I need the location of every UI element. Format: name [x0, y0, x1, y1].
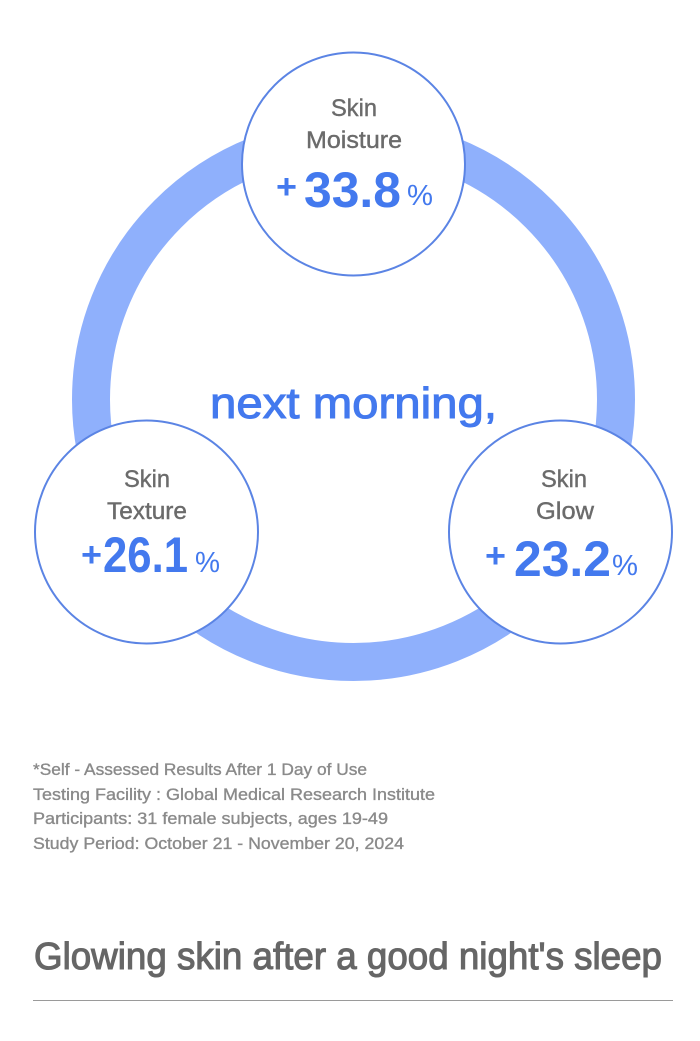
panel: skin glow: 23.2	[514, 531, 611, 587]
panel: skin texture: %	[195, 547, 220, 579]
panel: skin moisture: Skin	[331, 95, 377, 122]
ring	[91, 137, 616, 662]
panel: skin texture: +	[81, 536, 102, 574]
panel: skin moisture: %	[407, 180, 433, 212]
heading: Glowing skin after a good night's sleep	[34, 936, 662, 978]
center text: next morning: next morning,	[210, 379, 497, 428]
panel: skin glow: Skin	[541, 466, 587, 493]
panel: skin texture	[35, 420, 258, 644]
panel: skin glow: +	[485, 537, 506, 575]
footnote text: Study Period: October 21 - November 20, 2024	[33, 834, 404, 853]
footnote text: *Self - Assessed Results After 1 Day of Use	[33, 760, 367, 779]
panel: skin glow	[449, 420, 672, 644]
panel: skin glow: %	[612, 550, 638, 582]
panel: skin glow: Glow	[536, 498, 595, 525]
panel: skin moisture: +	[276, 168, 297, 206]
panel: skin moisture	[242, 52, 465, 276]
footnote text	[33, 760, 435, 853]
footnote text: Participants: 31 female subjects, ages 19-49	[33, 809, 388, 828]
panel: skin moisture: 33.8	[304, 162, 401, 218]
panel: skin texture: Texture	[107, 498, 187, 525]
panel: skin moisture: Moisture	[306, 127, 402, 154]
panel: skin texture: Skin	[124, 466, 170, 493]
footnote text: Testing Facility : Global Medical Research Institute	[33, 785, 435, 804]
panel: skin texture: 26.1	[103, 527, 188, 583]
